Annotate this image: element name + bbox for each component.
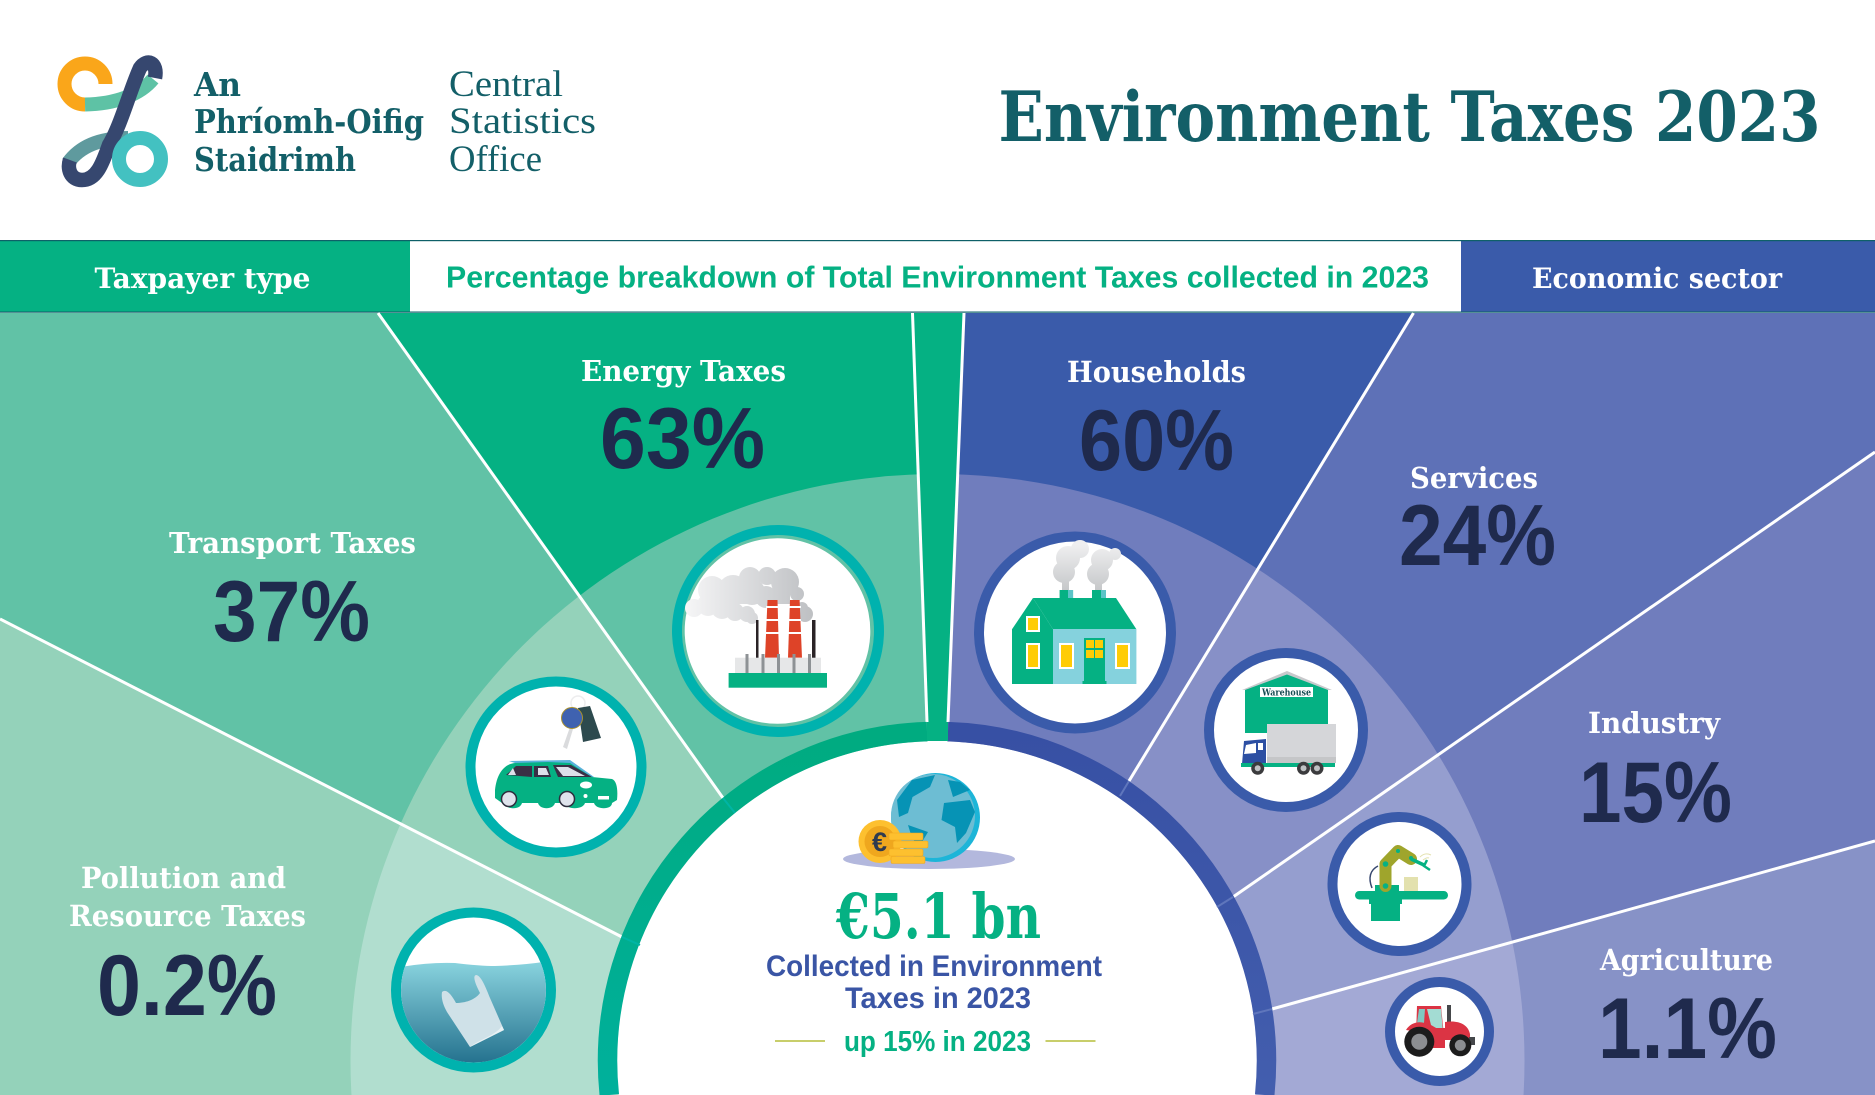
- heading: economic sector: Economic sector: [1532, 262, 1783, 295]
- segment: agriculture: [1598, 943, 1777, 1077]
- centre strip: [912, 313, 964, 741]
- inner pie band: [350, 474, 1524, 1095]
- segment: industry: [1579, 706, 1732, 841]
- segment: households: Households: [1067, 355, 1246, 389]
- segment: transport taxes: 37%: [213, 564, 370, 660]
- central amount: €5.1 bn: [835, 880, 1041, 953]
- icon: globe and coins: €: [872, 827, 887, 857]
- logo English name: Office: [449, 139, 542, 180]
- segment: industry: 15%: [1579, 745, 1732, 841]
- logo English name: [449, 64, 596, 180]
- logo Irish name: Staidrimh: [194, 140, 356, 179]
- segment: services: 24%: [1399, 488, 1556, 584]
- segment: industry: Industry: [1588, 706, 1721, 740]
- icon: house: [979, 536, 1171, 728]
- segment: energy taxes: 63%: [600, 391, 765, 487]
- logo Irish name: An: [193, 65, 241, 104]
- segment: households: 60%: [1079, 393, 1234, 489]
- segment: energy taxes: [581, 354, 786, 487]
- icon: globe and coins: [843, 773, 1015, 869]
- logo Irish name: Phríomh-Oifig: [194, 102, 424, 141]
- logo English name: Statistics: [449, 101, 596, 142]
- icon: car and keys: [470, 682, 642, 852]
- header logo: [64, 63, 596, 180]
- icon: power plant: [672, 525, 884, 737]
- segment: pollution and resource taxes: Pollution and: [81, 861, 286, 895]
- logo mark: [64, 63, 161, 180]
- segment: households: [1067, 355, 1246, 489]
- segment: transport taxes: Transport Taxes: [169, 526, 416, 560]
- outer pie segments: [0, 313, 1875, 1095]
- logo Irish name: [193, 65, 424, 179]
- central caption: Collected in Environment: [766, 950, 1102, 983]
- central disc: [608, 722, 1272, 1095]
- icon: warehouse and truck: Warehouse: [1261, 688, 1311, 698]
- icon: robot arm: [1332, 817, 1466, 951]
- heading: taxpayer type: Taxpayer type: [94, 262, 310, 295]
- segment: agriculture: Agriculture: [1599, 943, 1773, 977]
- central caption: Taxes in 2023: [845, 982, 1031, 1015]
- segment: pollution and resource taxes: [69, 861, 306, 1034]
- logo English name: Central: [449, 64, 563, 105]
- segment: pollution and resource taxes: 0.2%: [97, 938, 277, 1034]
- segment: agriculture: 1.1%: [1598, 981, 1777, 1077]
- segment: transport taxes: [169, 526, 416, 660]
- icon: plastic bag in water: [396, 912, 551, 1068]
- heading: percentage breakdown: Percentage breakdown of Total Environment Taxes collected in 2023: [446, 260, 1429, 294]
- segment: services: Services: [1410, 461, 1538, 495]
- icon: warehouse and truck: [1209, 653, 1363, 807]
- segment divider lines: [0, 313, 1875, 1009]
- segment: energy taxes: Energy Taxes: [581, 354, 786, 388]
- central growth note: up 15% in 2023: [844, 1026, 1031, 1058]
- central caption: [767, 954, 1102, 1008]
- segment: pollution and resource taxes: Resource Taxes: [69, 899, 306, 933]
- header bar: [0, 240, 1875, 313]
- icon: tractor: [1390, 982, 1489, 1081]
